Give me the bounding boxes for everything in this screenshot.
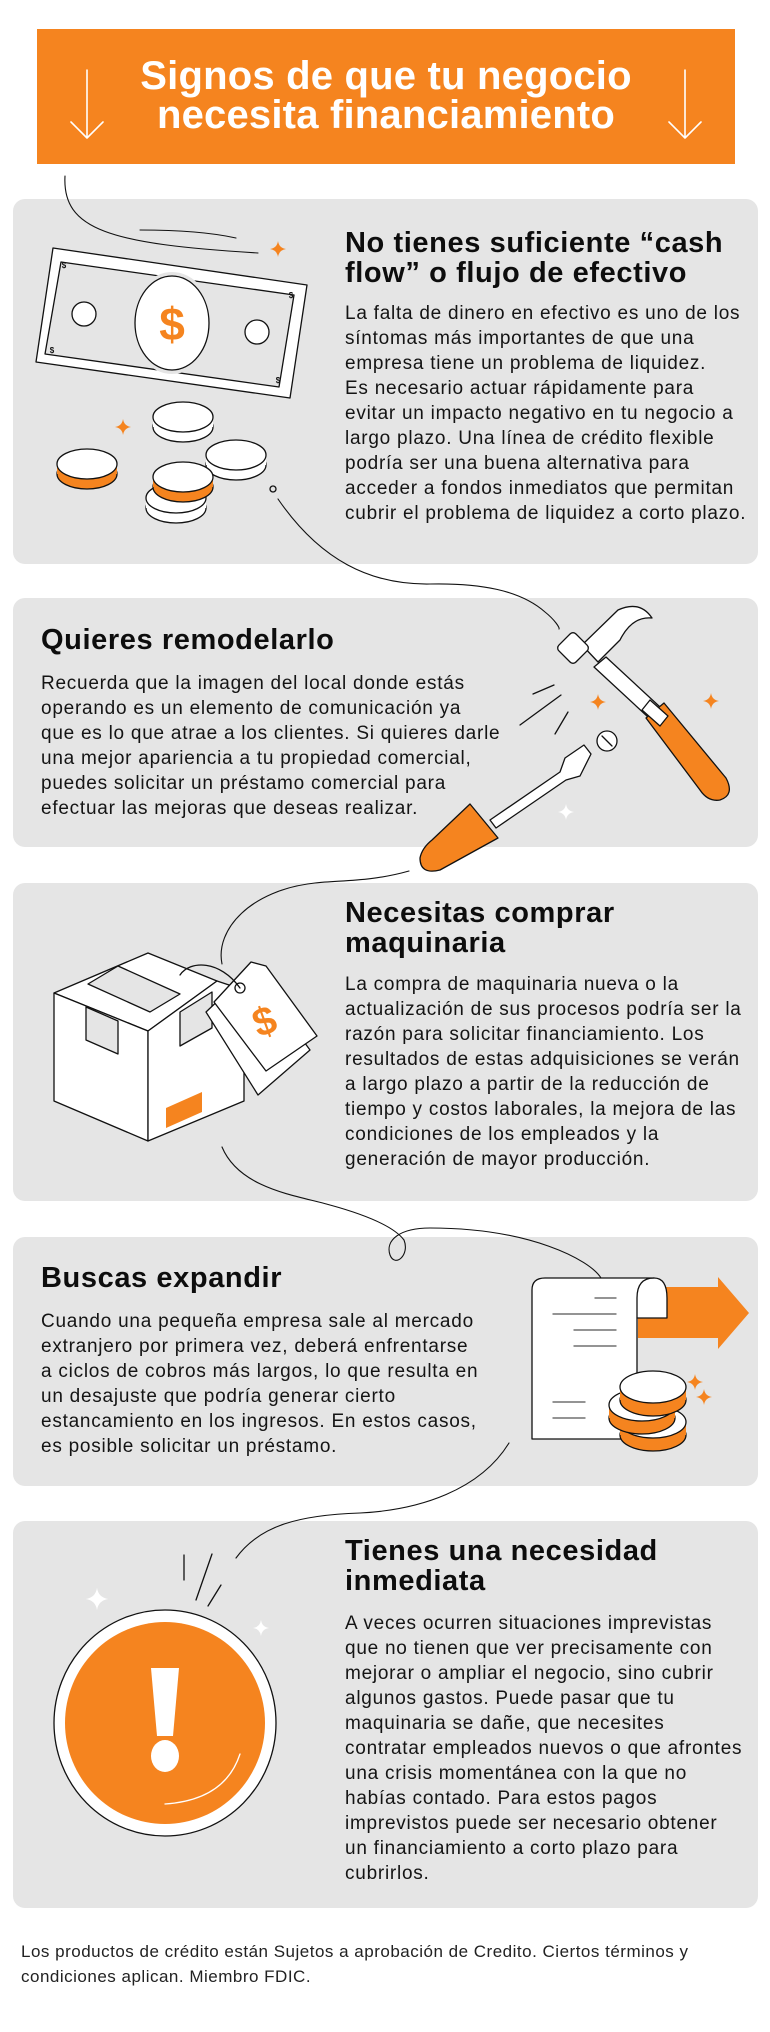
text: cash flow: Es necesario actuar rápidamente para <box>345 378 694 399</box>
text: expand: estancamiento en los ingresos. En estos casos, <box>41 1411 477 1432</box>
panel: machinery <box>13 883 758 1201</box>
heading: machinery: maquinaria <box>345 927 506 959</box>
text: remodel: Recuerda que la imagen del local donde estás <box>41 673 465 694</box>
text: expand: un desajuste que podría generar cierto <box>41 1386 396 1407</box>
panel: expand <box>13 1237 758 1486</box>
text: machinery: resultados de estas adquisiciones se verán <box>345 1049 740 1070</box>
text: immediate need: maquinaria se dañe, que necesites <box>345 1713 664 1734</box>
icon: dollar bill and coins: $ <box>159 298 185 350</box>
footer disclaimer <box>21 1942 689 1986</box>
heading: expand: Buscas expandir <box>41 1262 282 1294</box>
heading: cash flow <box>345 227 723 289</box>
icon: box with price tag <box>54 953 317 1141</box>
text: cash flow: evitar un impacto negativo en tu negocio a <box>345 403 734 424</box>
text: machinery: tiempo y costos laborales, la mejora de las <box>345 1099 736 1120</box>
text: cash flow: síntomas más importantes de que una <box>345 328 694 349</box>
footer disclaimer: condiciones aplican. Miembro FDIC. <box>21 1967 311 1986</box>
text: expand: Cuando una pequeña empresa sale al mercado <box>41 1311 474 1332</box>
heading: immediate need: inmediata <box>345 1565 486 1597</box>
title <box>140 54 632 137</box>
text: cash flow: acceder a fondos inmediatos que permitan <box>345 478 734 499</box>
icon: exclamation coin <box>54 1554 276 1836</box>
text: immediate need <box>345 1613 742 1884</box>
text: immediate need: contratar empleados nuevos o que afrontes <box>345 1738 742 1759</box>
title: Signos de que tu negocio <box>140 54 632 98</box>
text: remodel: puedes solicitar un préstamo comercial para <box>41 773 446 794</box>
text: immediate need: habías contado. Para estos pagos <box>345 1788 657 1809</box>
icon: header arrows <box>71 70 701 138</box>
icon: document with arrow and coins <box>532 1277 749 1451</box>
text: immediate need: A veces ocurren situaciones imprevistas <box>345 1613 712 1634</box>
text: machinery: razón para solicitar financiamiento. Los <box>345 1024 705 1045</box>
heading: machinery <box>345 897 615 959</box>
icon: box with price tag: $ <box>247 997 283 1046</box>
text: cash flow <box>345 303 746 524</box>
text: immediate need: imprevistos puede ser necesario obtener <box>345 1813 718 1834</box>
text: immediate need: algunos gastos. Puede pasar que tu <box>345 1688 675 1709</box>
icon: screwdriver <box>420 731 617 871</box>
heading: remodel: Quieres remodelarlo <box>41 624 334 656</box>
text: immediate need: una crisis momentánea con la que no <box>345 1763 687 1784</box>
connector line path <box>65 176 601 1558</box>
header banner <box>37 29 735 164</box>
text: machinery: generación de mayor producción. <box>345 1149 650 1170</box>
text: cash flow: La falta de dinero en efectivo es uno de los <box>345 303 740 324</box>
icon: dollar bill and coins: $ <box>50 346 55 355</box>
text: remodel: efectuar las mejoras que deseas realizar. <box>41 798 418 819</box>
text: remodel: operando es un elemento de comunicación ya <box>41 698 461 719</box>
text: machinery: a largo plazo a partir de la reducción de <box>345 1074 710 1095</box>
icon: dollar bill and coins: $ <box>62 261 67 270</box>
heading: immediate need: Tienes una necesidad <box>345 1535 658 1567</box>
heading: immediate need <box>345 1535 658 1597</box>
heading: cash flow: No tienes suficiente “cash <box>345 227 723 259</box>
text: machinery: condiciones de los empleados y la <box>345 1124 659 1145</box>
text: immediate need: un financiamiento a corto plazo para <box>345 1838 678 1859</box>
text: cash flow: largo plazo. Una línea de crédito flexible <box>345 428 714 449</box>
heading: machinery: Necesitas comprar <box>345 897 615 929</box>
icon: dollar bill and coins <box>36 241 307 523</box>
text: immediate need: cubrirlos. <box>345 1863 430 1884</box>
panel: remodel <box>13 598 758 847</box>
title: necesita financiamiento <box>157 93 615 137</box>
text: machinery: actualización de sus procesos podría ser la <box>345 999 742 1020</box>
text: expand: extranjero por primera vez, deberá enfrentarse <box>41 1336 468 1357</box>
text: expand: es posible solicitar un préstamo. <box>41 1436 337 1457</box>
text: cash flow: cubrir el problema de liquidez a corto plazo. <box>345 503 746 524</box>
panel: cash flow <box>13 199 758 564</box>
text: cash flow: empresa tiene un problema de liquidez. <box>345 353 706 374</box>
text: machinery <box>345 974 742 1170</box>
text: remodel: que es lo que atrae a los clientes. Si quieres darle <box>41 723 500 744</box>
text: remodel <box>41 673 500 819</box>
heading: cash flow: flow” o flujo de efectivo <box>345 257 687 289</box>
text: cash flow: podría ser una buena alternativa para <box>345 453 690 474</box>
icon: hammer <box>520 606 729 820</box>
text: expand <box>41 1311 478 1457</box>
text: immediate need: mejorar o ampliar el negocio, sino cubrir <box>345 1663 714 1684</box>
icon: dollar bill and coins: $ <box>289 291 294 300</box>
text: expand: a ciclos de cobros más largos, lo que resulta en <box>41 1361 478 1382</box>
text: machinery: La compra de maquinaria nueva o la <box>345 974 679 995</box>
text: immediate need: que no tienen que ver precisamente con <box>345 1638 713 1659</box>
text: remodel: una mejor apariencia a tu propiedad comercial, <box>41 748 472 769</box>
panel: immediate need <box>13 1521 758 1908</box>
footer disclaimer: Los productos de crédito están Sujetos a aprobación de Credito. Ciertos términos y <box>21 1942 689 1961</box>
icon: dollar bill and coins: $ <box>276 376 281 385</box>
